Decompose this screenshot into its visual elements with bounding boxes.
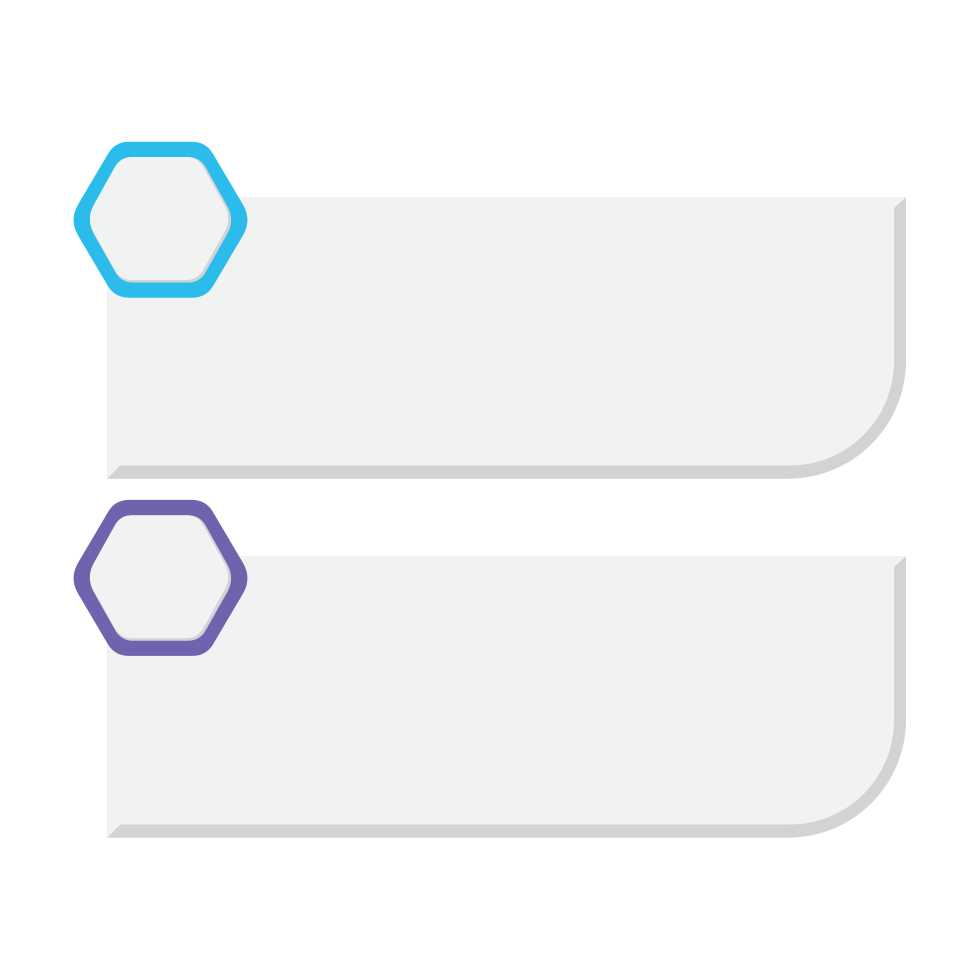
purple hexagon ring	[74, 500, 247, 656]
panel: bottom banner	[107, 556, 906, 838]
panel face: top banner	[107, 197, 906, 479]
purple hexagon inner face	[90, 515, 228, 638]
icon: purple hexagon badge	[74, 500, 247, 656]
purple hexagon inner shadow	[90, 515, 231, 641]
icon: blue hexagon badge	[74, 142, 247, 298]
blue hexagon inner face	[90, 157, 228, 280]
panel shadow: bottom banner	[107, 556, 906, 838]
panel shadow: top banner	[107, 197, 906, 479]
panel face: bottom banner	[107, 556, 906, 838]
blue hexagon ring	[74, 142, 247, 298]
blue hexagon inner shadow	[90, 157, 231, 282]
panel: top banner	[107, 197, 906, 479]
